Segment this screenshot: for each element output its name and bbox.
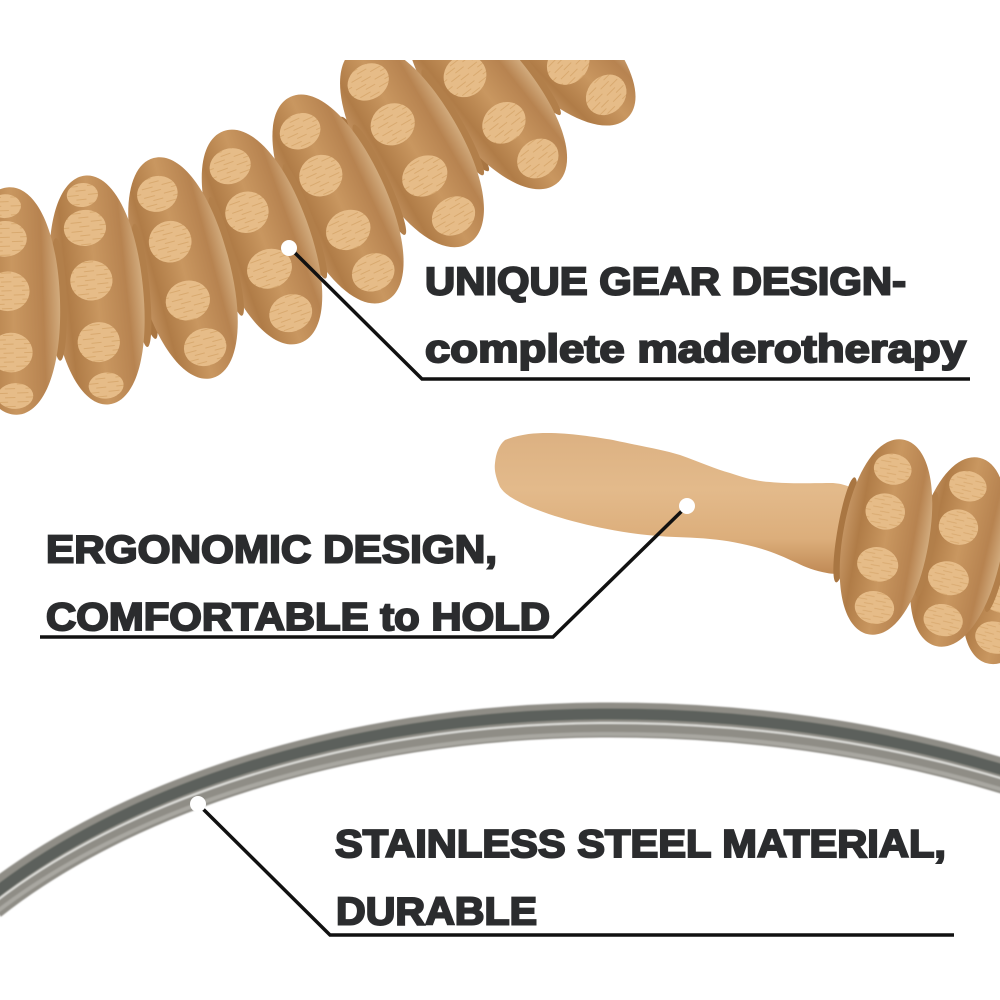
callout line (40, 506, 687, 637)
callout dot (190, 796, 206, 812)
heading line 1: UNIQUE GEAR DESIGN- (425, 260, 906, 304)
wooden gear roller (0, 60, 636, 415)
callout dot (679, 498, 695, 514)
stainless steel rod (0, 714, 1000, 917)
heading line 2: DURABLE (336, 890, 537, 934)
wooden handle with discs (495, 431, 1000, 676)
heading line 2: complete maderotherapy (425, 328, 966, 371)
callout line (198, 804, 954, 935)
heading line 1: STAINLESS STEEL MATERIAL, (335, 823, 946, 866)
callout dot (281, 240, 297, 256)
callout line (290, 248, 970, 379)
heading line 1: ERGONOMIC DESIGN, (46, 528, 497, 572)
callout: ergonomic design (40, 498, 695, 639)
heading line 2: COMFORTABLE to HOLD (46, 596, 550, 639)
callout: stainless steel (190, 796, 954, 935)
handle (495, 433, 860, 574)
callout: gear design (281, 240, 970, 379)
